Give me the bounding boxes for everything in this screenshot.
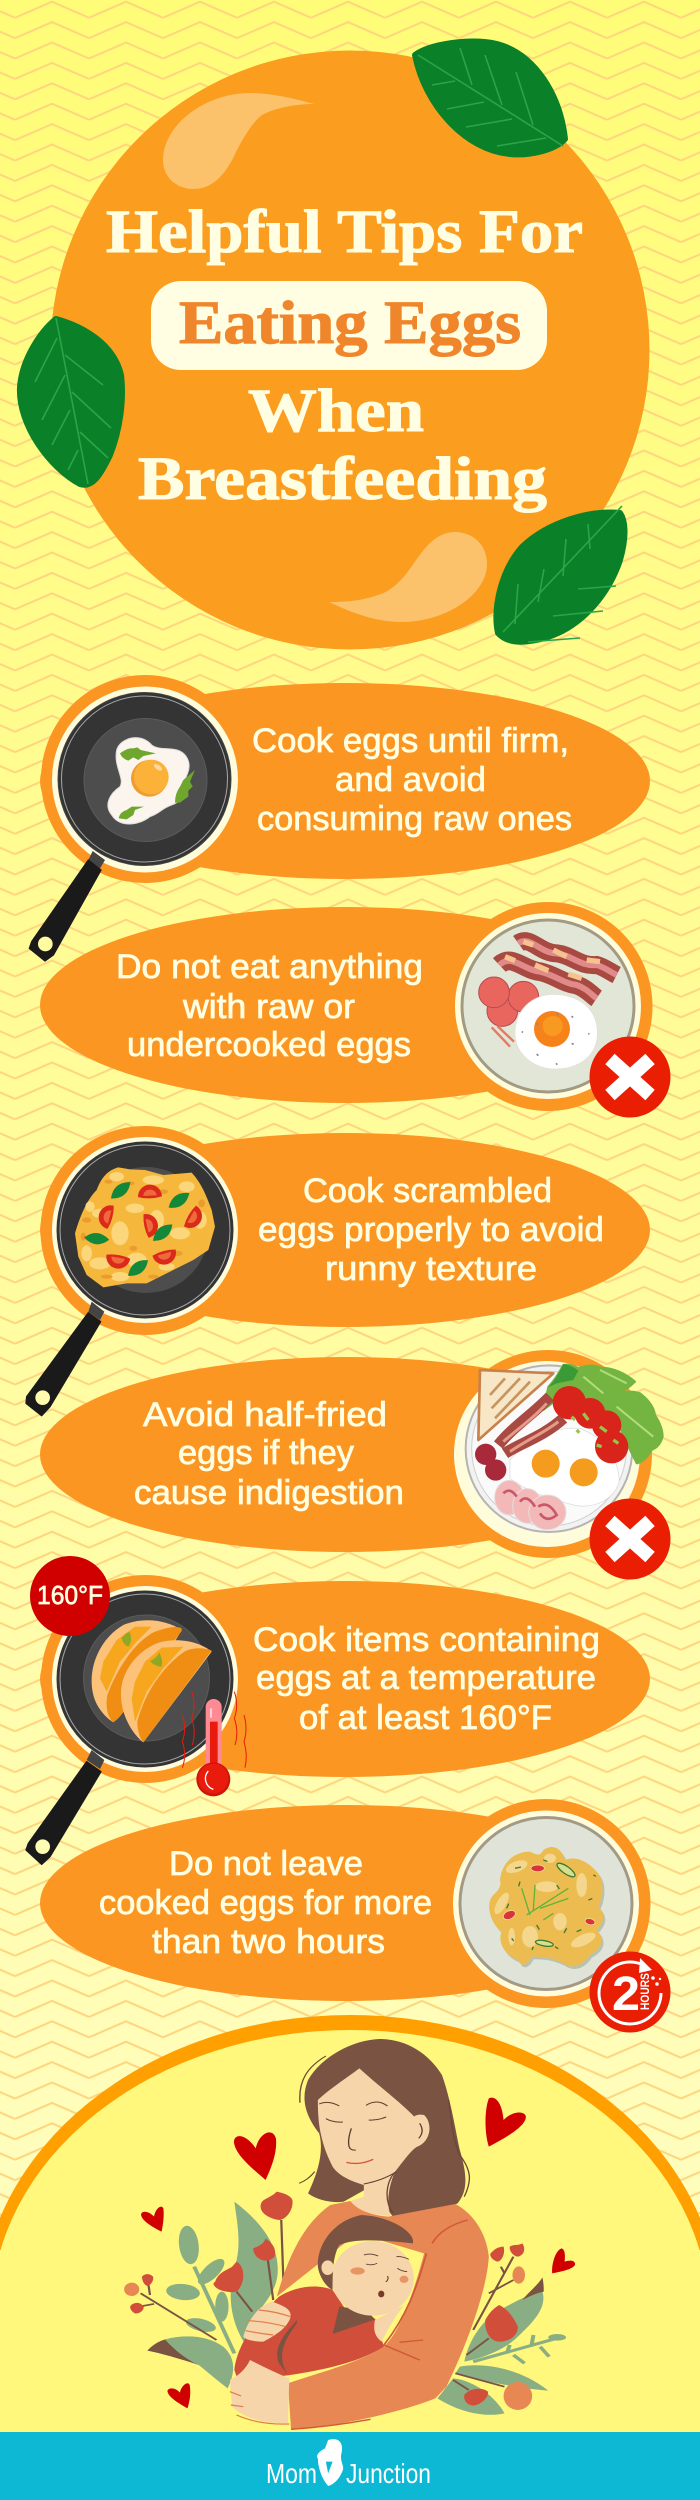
logo wordmark: Junction — [346, 2458, 431, 2489]
tip 2 text: Do not eat anything — [116, 948, 423, 986]
tip 2 panel — [40, 902, 670, 1118]
tip 1 panel — [29, 675, 650, 961]
mother's facial features — [319, 2102, 422, 2184]
mother's hair — [304, 2039, 465, 2217]
tip 4 text: cause indigestion — [134, 1474, 404, 1512]
icon: 2 hours clock badge: HOURS — [640, 1973, 652, 2010]
tip 1 text — [252, 722, 572, 838]
leaf left — [20, 318, 122, 485]
tip 6 text: than two hours — [152, 1923, 385, 1961]
mother's sweater — [277, 2201, 489, 2429]
icon: frying pan with empanadas — [26, 1590, 234, 1864]
tip 4 text: eggs if they — [178, 1434, 354, 1472]
tip 3 text — [258, 1172, 604, 1288]
illustration: mother holding baby — [124, 2039, 575, 2429]
highlight drop top — [163, 93, 314, 189]
logo: mother icon — [317, 2439, 343, 2486]
badge: 160°F — [30, 1556, 110, 1636]
tip 4 text — [134, 1396, 404, 1512]
tip 1 text: consuming raw ones — [257, 800, 572, 838]
title: Breastfeeding — [138, 446, 547, 513]
tip 5 text: eggs at a temperature — [256, 1659, 596, 1697]
icon: full breakfast plate — [466, 1364, 663, 1532]
bottom arch — [0, 2015, 700, 2500]
mother's hands — [230, 2302, 291, 2424]
flowers and leaves left — [124, 2192, 293, 2388]
tip 3 text: eggs properly to avoid — [258, 1211, 604, 1249]
icon: red cross badge — [590, 1036, 670, 1118]
badge: 160°F: 160°F — [37, 1580, 103, 1610]
icon: frying pan with scrambled eggs — [26, 1142, 234, 1416]
flowers and leaves right — [438, 2243, 566, 2415]
tip 3 panel — [26, 1126, 650, 1416]
tip 1 text: Cook eggs until firm, — [252, 722, 569, 760]
icon: 2 hours clock badge: 2 — [612, 1968, 640, 2021]
title pill — [151, 281, 547, 370]
title — [106, 199, 583, 513]
tip 6 panel — [40, 1799, 670, 2032]
title: When — [248, 378, 424, 445]
logo wordmark: Mom — [266, 2458, 317, 2489]
leaf top right — [415, 42, 565, 154]
tip 6 text — [99, 1845, 432, 1961]
icon: thermometer with heat waves — [182, 1692, 246, 1796]
tip 5 text: Cook items containing — [253, 1621, 600, 1659]
tip 1 text: and avoid — [335, 761, 486, 799]
leaf bottom right — [496, 506, 625, 642]
tip 5 panel — [26, 1556, 650, 1864]
icon: plate of creamy egg dumplings — [460, 1818, 632, 1990]
tip 6 text: cooked eggs for more — [99, 1884, 432, 1922]
tip 5 text — [253, 1621, 600, 1737]
icon: red cross badge — [590, 1498, 670, 1580]
icon: plate with bacon and egg — [462, 920, 634, 1092]
tip 4 panel — [40, 1350, 670, 1580]
tip 2 text — [116, 948, 423, 1064]
highlight drop bottom — [329, 532, 487, 622]
tip 2 text: undercooked eggs — [127, 1026, 411, 1064]
tip 3 text: Cook scrambled — [303, 1172, 552, 1210]
tip 5 text: of at least 160°F — [299, 1699, 552, 1737]
tip 2 text: with raw or — [182, 988, 355, 1026]
icon: 2 hours clock badge — [590, 1952, 670, 2032]
mother's face and neck — [318, 2068, 429, 2216]
icon: frying pan with fried egg — [29, 692, 231, 961]
tip 6 text: Do not leave — [169, 1845, 363, 1883]
title: Helpful Tips For — [106, 199, 583, 266]
logo wordmark — [266, 2458, 431, 2489]
tip 4 text: Avoid half-fried — [143, 1396, 387, 1434]
footer bar — [0, 2432, 700, 2500]
header circle — [50, 50, 650, 650]
tip 3 text: runny texture — [325, 1250, 537, 1288]
title: Eating Eggs — [179, 290, 521, 357]
hearts — [141, 2098, 575, 2408]
baby — [234, 2215, 414, 2378]
